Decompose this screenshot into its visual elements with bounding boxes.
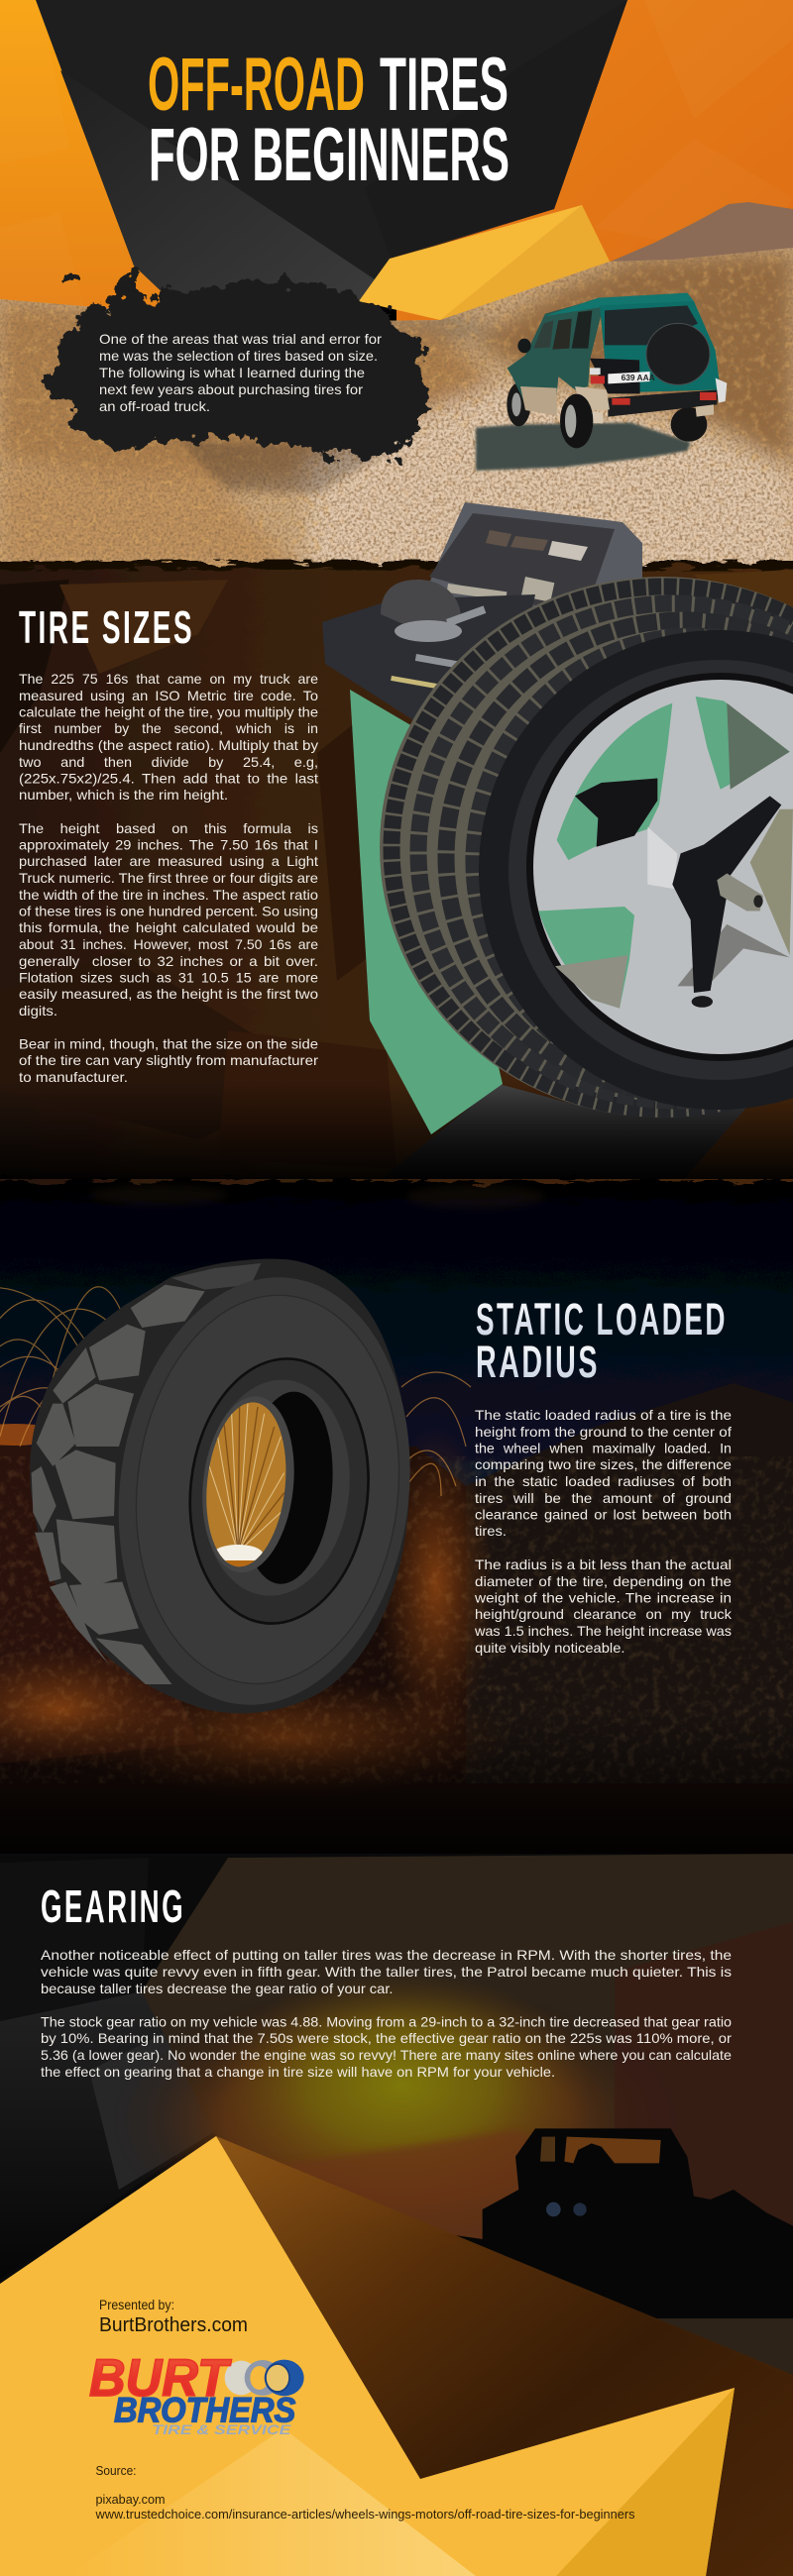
- section: header hero: [0, 0, 793, 575]
- fire-lit ground glow: [0, 1424, 515, 1798]
- photo: desert ground: [0, 248, 793, 575]
- lighter footer facet: [65, 2428, 476, 2576]
- title: OFF-ROAD: [148, 43, 365, 127]
- body text: tire sizes: Flotation sizes such as 31 10.5 15 are more: [19, 969, 318, 985]
- translucent brown polygon: [216, 2136, 793, 2576]
- grey facet in wedge: [60, 70, 375, 317]
- machine screen: [429, 513, 615, 614]
- body text: gearing: by 10%. Bearing in mind that the 7.50s were stock, the effective gear ratio on the 225s was 110% more, or: [41, 2030, 732, 2046]
- machine panel: [426, 502, 642, 634]
- body text: tire sizes: number, which is the rim height.: [19, 787, 228, 803]
- website: BurtBrothers.com: [99, 2314, 248, 2336]
- title: [148, 43, 510, 197]
- source credits: www.trustedchoice.com/insurance-articles/wheels-wings-motors/off-road-tire-sizes-for-beginners: [95, 2507, 635, 2522]
- body text: tire sizes: of the tire can vary slightly from manufacturer: [19, 1052, 318, 1068]
- yellow polygon accent: [359, 205, 610, 320]
- left dark hill: [0, 1439, 198, 1764]
- rim openings and hub: [538, 697, 793, 1009]
- intro text: [99, 331, 382, 414]
- black wedge behind title: [36, 0, 627, 322]
- background: black base: [0, 1854, 793, 2576]
- background: orange left panel: [0, 0, 297, 337]
- mountain: [585, 202, 793, 297]
- body text: tire sizes: digits.: [19, 1003, 57, 1019]
- presented by: Presented by:: [99, 2298, 174, 2312]
- photo: teal off-road truck: [476, 293, 727, 471]
- body text: tire sizes: hundredths (the aspect ratio). Multiply that by: [19, 737, 318, 753]
- heading: static loaded radius: RADIUS: [476, 1337, 600, 1387]
- photo: forklift tire: [30, 1259, 434, 1722]
- photo: teal off-road truck: 639 AAA: [622, 373, 655, 382]
- grey floor polygon: [382, 1084, 753, 1179]
- sun glow: [213, 1972, 590, 2200]
- body text: tire sizes: two and then divide by 25.4, e.g,: [19, 754, 318, 770]
- heading: gearing: GEARING: [41, 1880, 185, 1932]
- body text: tire sizes: of these tires is one hundred percent. So using: [19, 904, 318, 919]
- dark facet in wedge: [365, 0, 627, 260]
- body text: static loaded radius: [474, 1407, 733, 1656]
- body text: tire sizes: The height based on this formula is: [19, 820, 318, 836]
- ink splatter shadow: [178, 441, 396, 493]
- body text: static loaded radius: in the static loaded radiuses of both: [475, 1473, 732, 1489]
- logo BURT: BURT: [89, 2349, 232, 2408]
- source credits: Source:: [95, 2463, 137, 2478]
- body text: static loaded radius: The static loaded radius of a tire is the: [475, 1407, 732, 1423]
- logo wheels: [225, 2360, 304, 2396]
- body text: gearing: because taller tires decrease the gear ratio of your car.: [41, 1981, 393, 1996]
- balancer dome: [381, 580, 461, 634]
- bottom fade: [0, 1714, 793, 1858]
- body text: static loaded radius: height from the ground to the center of: [475, 1424, 732, 1440]
- title: TIRES: [380, 43, 509, 127]
- photo: tire on balancer: [380, 577, 793, 1118]
- body text: static loaded radius: clearance gained or lost between both: [475, 1506, 732, 1522]
- body text: gearing: vehicle was quite revvy even in fifth gear. With the taller tires, the Patrol became much quieter. This is: [41, 1964, 732, 1980]
- background: night sky: [0, 1181, 793, 1498]
- source credits: [95, 2463, 635, 2522]
- body text: gearing: Another noticeable effect of putting on taller tires was the decrease in RPM. With the shorter tires, the: [41, 1947, 732, 1963]
- logo BROTHERS: BROTHERS: [114, 2391, 296, 2429]
- body text: tire sizes: measured using an ISO Metric tire code. To: [19, 688, 318, 703]
- body text: tire sizes: first number by the second, which is in: [19, 720, 318, 736]
- grey low-poly facets: [0, 1858, 217, 2279]
- hub bracket and threaded bolt: [672, 796, 781, 1008]
- photo: wheel balancer machine: [322, 502, 642, 1134]
- section: tire sizes: [0, 502, 793, 1209]
- body text: tire sizes: purchased later are measured using a Light: [19, 853, 318, 869]
- body text: tire sizes: [19, 671, 318, 1085]
- body text: static loaded radius: weight of the vehicle. The increase in: [474, 1589, 732, 1605]
- body text: static loaded radius: tires.: [475, 1523, 507, 1539]
- fade to black: [0, 1080, 793, 1179]
- green cabinet: [350, 690, 503, 1134]
- body text: tire sizes: the width of the tire in inches. The aspect ratio: [19, 887, 318, 903]
- logo tagline: TIRE & SERVICE: [152, 2421, 291, 2437]
- jeep silhouette: [436, 2128, 793, 2318]
- body text: tire sizes: (225x.75x2)/25.4. Then add that to the last: [19, 771, 318, 787]
- body text: static loaded radius: comparing two tire sizes, the difference: [475, 1456, 732, 1472]
- intro text: One of the areas that was trial and error for: [99, 331, 382, 347]
- background: brown low-poly panel: [0, 565, 793, 1209]
- body text: static loaded radius: quite visibly noticeable.: [475, 1640, 624, 1656]
- sidewall ring: [509, 660, 793, 1080]
- torn black edge: [0, 561, 793, 570]
- yellow footer polygon: [0, 2136, 735, 2576]
- body text: gearing: [41, 1947, 732, 2080]
- ink splatter panel: [48, 271, 424, 472]
- distant mountain: [466, 1383, 793, 1783]
- body text: tire sizes: approximately 29 inches. The 7.50 16s that I: [19, 836, 318, 852]
- section: static loaded radius: [0, 1181, 793, 1863]
- heading: tire sizes: TIRE SIZES: [19, 601, 194, 653]
- orange low-poly facets: [0, 0, 793, 327]
- body text: tire sizes: calculate the height of the tire, you multiply the: [19, 703, 318, 719]
- intro text: The following is what I learned during the: [99, 365, 365, 380]
- intro text: next few years about purchasing tires for: [99, 381, 363, 397]
- section: gearing: [0, 1854, 793, 2576]
- darker footer facet: [556, 2388, 735, 2576]
- body text: static loaded radius: height/ground clearance on my truck: [475, 1606, 733, 1622]
- screen buttons: [447, 530, 588, 602]
- body text: tire sizes: generally closer to 32 inches or a bit over.: [19, 953, 318, 969]
- tool tray: [322, 594, 535, 730]
- logo: Burt Brothers: [89, 2349, 304, 2437]
- source credits: pixabay.com: [95, 2492, 165, 2507]
- body text: gearing: the effect on gearing that a change in tire size will have on RPM for your vehicle.: [41, 2064, 555, 2080]
- background: night ground: [0, 1447, 793, 1863]
- body text: tire sizes: The 225 75 16s that came on my truck are: [19, 671, 318, 687]
- intro text: me was the selection of tires based on size.: [99, 348, 378, 364]
- tire sidewall: [479, 630, 793, 1110]
- background: orange right panel: [396, 0, 793, 337]
- body text: tire sizes: to manufacturer.: [19, 1069, 128, 1085]
- body text: static loaded radius: The radius is a bit less than the actual: [475, 1556, 732, 1572]
- rim face: [533, 680, 793, 1054]
- ground rock texture: [0, 1456, 793, 1783]
- heading: static loaded radius: [476, 1294, 728, 1387]
- body text: static loaded radius: the wheel when maximally loaded. In: [475, 1441, 732, 1456]
- tray tools: [391, 605, 486, 690]
- tread blocks: [392, 587, 793, 1110]
- body text: tire sizes: Bear in mind, though, that the size on the side: [19, 1036, 318, 1052]
- warm sunset area: [142, 1854, 793, 2378]
- body text: tire sizes: this formula, the height calculated would be: [19, 919, 318, 935]
- alloy rim: [526, 673, 793, 1061]
- body text: tire sizes: about 31 inches. However, most 7.50 16s are: [19, 936, 318, 952]
- body text: gearing: The stock gear ratio on my vehicle was 4.88. Moving from a 29-inch to a 32-inch tire decreased that gear ratio: [41, 2013, 732, 2029]
- body text: tire sizes: easily measured, as the height is the first two: [19, 986, 318, 1002]
- tire tread: [380, 577, 793, 1118]
- body text: static loaded radius: diameter of the tire, depending on the: [475, 1573, 732, 1589]
- light-painted sparks: [0, 1287, 471, 1496]
- brown low-poly facets: [0, 570, 793, 1169]
- title: FOR BEGINNERS: [149, 113, 510, 197]
- warm glow: [109, 1982, 684, 2259]
- lower horizon haze: [248, 2130, 634, 2269]
- body text: static loaded radius: tires will be the amount of ground: [475, 1490, 732, 1506]
- brown dust on top edge: [89, 1185, 545, 1209]
- body text: static loaded radius: was 1.5 inches. The height increase was: [474, 1623, 732, 1639]
- intro text: an off-road truck.: [99, 398, 210, 414]
- reddish right haze: [615, 1922, 793, 2249]
- body text: gearing: 5.36 (a lower gear). No wonder the engine was so revvy! There are many sites online where you can calculate: [41, 2047, 732, 2063]
- body text: tire sizes: Truck numeric. The first three or four digits are: [19, 870, 318, 886]
